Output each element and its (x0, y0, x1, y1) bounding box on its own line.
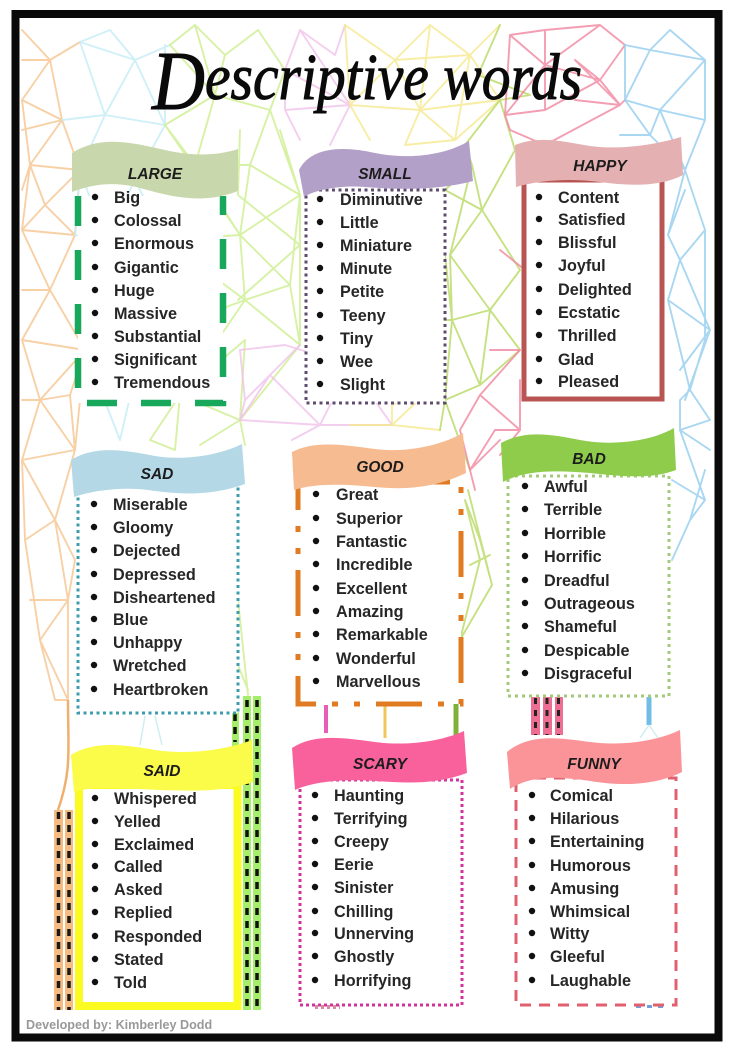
word list: bad: Shameful (544, 618, 617, 636)
word list: said (92, 790, 202, 992)
word list: good: Fantastic (336, 533, 407, 551)
word list: said: Asked (114, 881, 163, 899)
word list: small (317, 191, 423, 394)
panel: sad (71, 444, 245, 713)
word list: large: Gigantic (114, 259, 179, 277)
panel: bad (501, 428, 676, 696)
panel: good (292, 433, 466, 704)
word list: small: Minute (340, 260, 392, 278)
word list: funny: Amusing (550, 880, 619, 898)
panel: said (71, 740, 253, 1006)
word list: happy: Blissful (558, 234, 616, 252)
heading: happy: HAPPY (573, 158, 628, 175)
word list: bad: Terrible (544, 501, 602, 519)
word list: scary (312, 787, 414, 990)
banner: happy (515, 137, 683, 187)
pillars: pink centre right (531, 697, 563, 735)
word list: bad: Horrific (544, 548, 602, 566)
word list: small: Little (340, 214, 379, 232)
word list: bad: Despicable (544, 642, 629, 660)
word list: scary: Haunting (334, 787, 404, 805)
word list: said: Responded (114, 928, 202, 946)
word list: scary: Chilling (334, 903, 393, 921)
word list: scary: Unnerving (334, 925, 414, 943)
heading: small: SMALL (358, 166, 412, 183)
word list: scary: Terrifying (334, 810, 407, 828)
banner: said (71, 740, 253, 792)
heading: bad: BAD (572, 451, 606, 468)
word list: bad: Disgraceful (544, 665, 632, 683)
word list: good: Amazing (336, 603, 403, 621)
pillars: orange left (54, 700, 73, 1010)
word list: funny: Whimsical (550, 903, 630, 921)
panel: small (299, 141, 473, 403)
decorative stitched pillars (54, 696, 664, 1010)
word list: good: Marvellous (336, 673, 421, 691)
word list: small: Teeny (340, 307, 386, 325)
word list: bad: Outrageous (544, 595, 635, 613)
pillars: green left (232, 696, 261, 1010)
word list: funny: Humorous (550, 857, 631, 875)
heading: good: GOOD (356, 459, 404, 476)
word list: sad: Heartbroken (113, 681, 208, 699)
word list: small: Petite (340, 283, 384, 301)
word list: large: Huge (114, 282, 154, 300)
word list: funny: Hilarious (550, 810, 619, 828)
banner: scary (292, 731, 467, 790)
word list: said: Called (114, 858, 163, 876)
heading: funny: FUNNY (567, 756, 622, 773)
word list: said: Yelled (114, 813, 161, 831)
word list: good: Incredible (336, 556, 412, 574)
word list: large: Colossal (114, 212, 181, 230)
word list: large: Big (114, 189, 140, 207)
word list: bad: Awful (544, 478, 588, 496)
word list: sad: Miserable (113, 496, 188, 514)
word list: funny: Laughable (550, 972, 631, 990)
panel: happy (515, 137, 683, 399)
word list: sad: Disheartened (113, 589, 216, 607)
word list: funny (529, 787, 644, 990)
word list: bad (522, 478, 635, 683)
word list: happy: Joyful (558, 257, 606, 275)
word list: large: Significant (114, 351, 197, 369)
title: escriptive words (205, 41, 582, 114)
heading: large: LARGE (128, 166, 183, 183)
word list: funny: Entertaining (550, 833, 644, 851)
heading: sad: SAD (141, 466, 173, 483)
word list: sad: Dejected (113, 542, 180, 560)
word list: large: Tremendous (114, 374, 210, 392)
word list: bad: Horrible (544, 525, 606, 543)
word list: sad: Gloomy (113, 519, 173, 537)
connector threads (140, 697, 664, 1007)
word list: large: Enormous (114, 235, 194, 253)
word list: small: Diminutive (340, 191, 423, 209)
word list: said: Stated (114, 951, 163, 969)
word list: small: Tiny (340, 330, 373, 348)
word list: scary: Sinister (334, 879, 394, 897)
word list: said: Exclaimed (114, 836, 194, 854)
word list: large (92, 189, 210, 392)
word list: sad: Blue (113, 611, 148, 629)
word list: good: Great (336, 486, 379, 504)
banner: funny (507, 730, 682, 789)
word list: sad (91, 496, 216, 699)
banner: large (72, 142, 238, 198)
word list: bad: Dreadful (544, 572, 610, 590)
word list: scary: Eerie (334, 856, 374, 874)
word list: happy: Delighted (558, 281, 632, 299)
banner: small (299, 141, 473, 197)
banner: sad (71, 444, 245, 497)
word list: said: Told (114, 974, 147, 992)
word list: happy: Ecstatic (558, 304, 620, 322)
word list: said: Whispered (114, 790, 197, 808)
word list: funny: Gleeful (550, 948, 605, 966)
word list: sad: Depressed (113, 566, 196, 584)
word list: small: Slight (340, 376, 386, 394)
word list: happy: Content (558, 189, 620, 207)
heading: said: SAID (143, 763, 181, 780)
banner: good (292, 433, 466, 490)
word list: happy: Satisfied (558, 211, 625, 229)
word list: said: Replied (114, 904, 172, 922)
word list: good: Wonderful (336, 650, 416, 668)
credit: Developed by: Kimberley Dodd (26, 1018, 212, 1032)
panel: scary (292, 731, 467, 1005)
word list: good (313, 486, 428, 691)
title: D (151, 35, 205, 128)
panel: funny (507, 730, 682, 1005)
word list: large: Massive (114, 305, 177, 323)
heading: scary: SCARY (353, 756, 409, 773)
background: coloured triangle mesh (22, 25, 710, 700)
word list: happy: Glad (558, 351, 594, 369)
word list: small: Wee (340, 353, 373, 371)
word list: good: Remarkable (336, 626, 428, 644)
word list: happy: Pleased (558, 373, 619, 391)
word list: happy: Thrilled (558, 327, 616, 345)
word list: good: Excellent (336, 580, 408, 598)
word list: scary: Creepy (334, 833, 389, 851)
word list: scary: Ghostly (334, 948, 394, 966)
word list: sad: Unhappy (113, 634, 182, 652)
word list: small: Miniature (340, 237, 412, 255)
word list: sad: Wretched (113, 657, 186, 675)
banner: bad (501, 428, 676, 482)
word list: happy (536, 189, 632, 391)
word list: large: Substantial (114, 328, 201, 346)
title (151, 35, 582, 128)
word list: funny: Comical (550, 787, 613, 805)
word list: scary: Horrifying (334, 972, 411, 990)
panel: large (72, 142, 238, 403)
word list: funny: Witty (550, 925, 589, 943)
word list: good: Superior (336, 510, 403, 528)
